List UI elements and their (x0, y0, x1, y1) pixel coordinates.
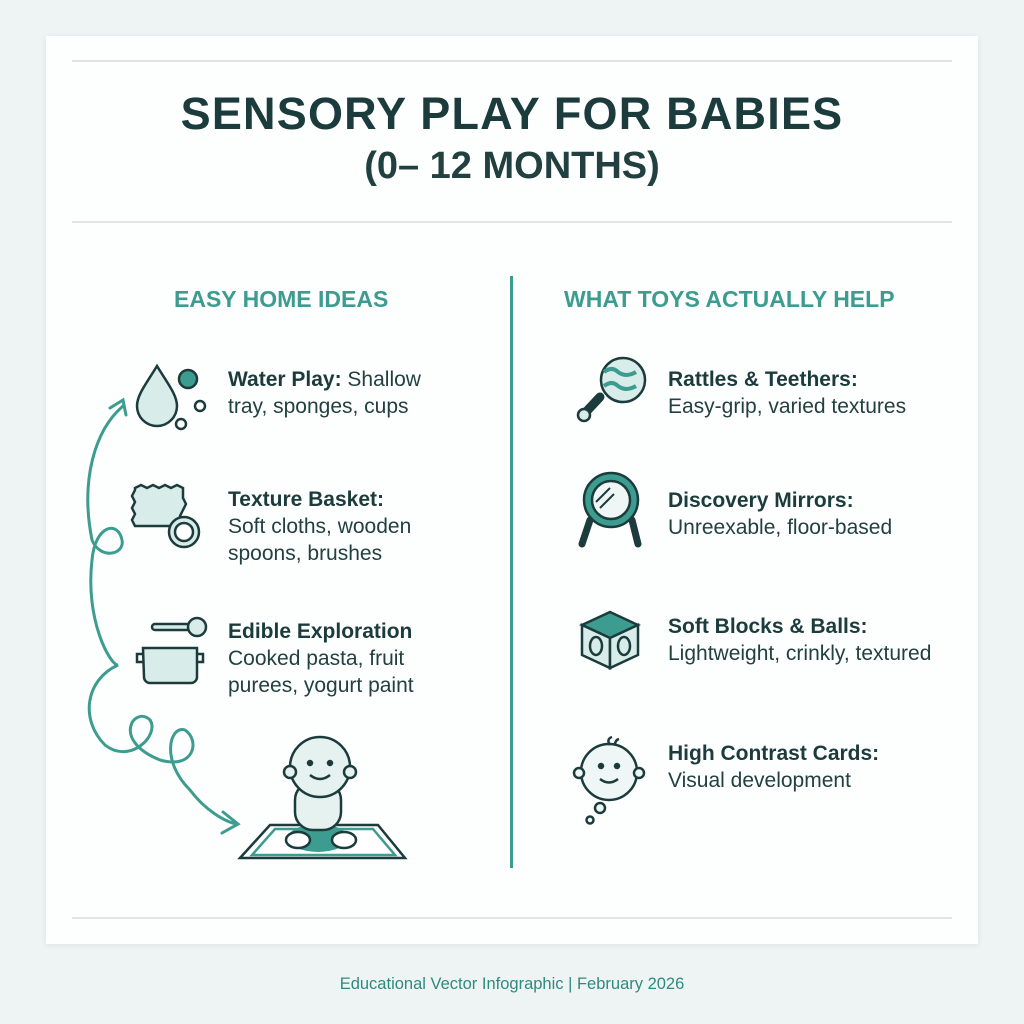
item: texture basket: Soft cloths, wooden (228, 515, 411, 538)
item: mirrors: Unreexable, floor-based (668, 516, 892, 539)
item: water play: Water Play: Shallow (228, 368, 421, 391)
item: edible exploration: Edible Exploration (228, 620, 412, 643)
item: rattles: Easy-grip, varied textures (668, 395, 906, 418)
arrow: curly path (88, 400, 238, 833)
icon: soft block (582, 612, 638, 668)
icon: baby face thought (574, 737, 644, 824)
icon: mirror (582, 473, 638, 544)
heading: what toys actually help: WHAT TOYS ACTUALLY HELP (564, 286, 895, 312)
icon: water drop (137, 366, 205, 429)
item: soft blocks (668, 615, 931, 665)
item: soft blocks: Lightweight, crinkly, textured (668, 642, 931, 665)
item: soft blocks: Soft Blocks & Balls: (668, 615, 868, 638)
item: texture basket: Texture Basket: (228, 488, 384, 511)
icon: rattle (578, 358, 645, 421)
heading: easy home ideas: EASY HOME IDEAS (174, 286, 388, 312)
icon: spoon and pot (137, 618, 206, 683)
icon: texture cloth + button (132, 485, 199, 547)
title: SENSORY PLAY FOR BABIES (181, 88, 843, 139)
center divider (510, 276, 513, 868)
item: edible exploration: Cooked pasta, fruit (228, 647, 404, 670)
footer: Educational Vector Infographic | February 2026 (340, 975, 684, 993)
item: water play: tray, sponges, cups (228, 395, 409, 418)
item: high contrast cards (668, 742, 879, 792)
icon: baby on mat (240, 737, 405, 858)
item: water play (228, 368, 421, 418)
item: texture basket: spoons, brushes (228, 542, 382, 565)
item: rattles: Rattles & Teethers: (668, 368, 858, 391)
item: high contrast cards: High Contrast Cards: (668, 742, 879, 765)
item: mirrors (668, 489, 892, 539)
item: high contrast cards: Visual development (668, 769, 851, 792)
item: edible exploration (228, 620, 414, 697)
subtitle: (0– 12 MONTHS) (364, 145, 660, 187)
item: mirrors: Discovery Mirrors: (668, 489, 854, 512)
item: edible exploration: purees, yogurt paint (228, 674, 414, 697)
item: texture basket (228, 488, 411, 565)
item: rattles (668, 368, 906, 418)
